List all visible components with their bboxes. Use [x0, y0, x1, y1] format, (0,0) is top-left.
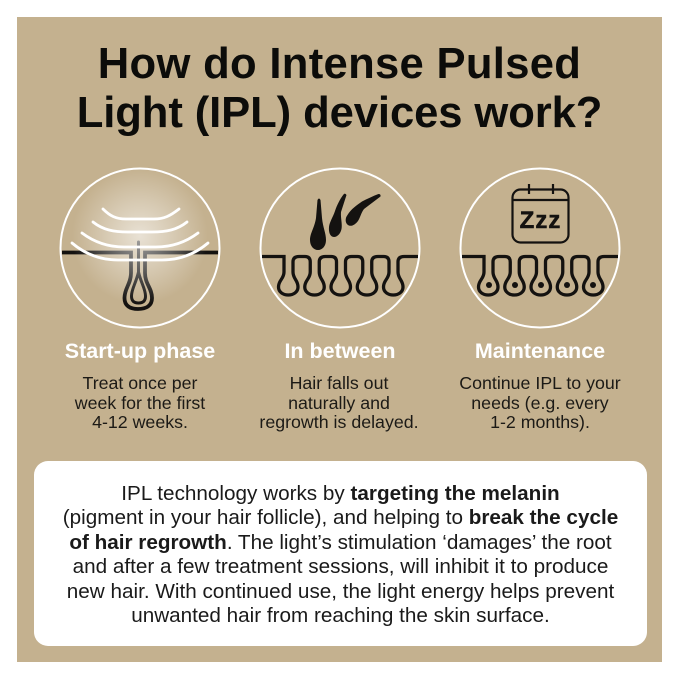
heading: maintenance: Maintenance — [475, 339, 605, 363]
text: in between: naturally and — [288, 392, 390, 412]
hair 1 — [310, 198, 326, 250]
icon: maintenance, calendar and dormant follicles — [460, 168, 620, 328]
hair 2 — [329, 194, 346, 237]
text: explanation: and after a few treatment sessions, will inhibit it to produce — [73, 555, 608, 578]
text: in between: Hair falls out — [290, 373, 388, 393]
title: How do Intense Pulsed — [98, 40, 581, 88]
text: explanation — [63, 482, 618, 627]
text: explanation: new hair. With continued use, the light energy helps prevent — [67, 580, 614, 603]
text: maintenance: Continue IPL to your — [459, 373, 621, 393]
hair 3 — [346, 194, 381, 226]
icon: start-up phase, light on follicle — [60, 168, 220, 328]
text: start-up phase: Treat once per — [82, 373, 197, 393]
text: maintenance — [459, 373, 621, 432]
heading: in between: In between — [284, 339, 396, 363]
title — [77, 40, 602, 136]
text: start-up phase: 4-12 weeks. — [92, 412, 188, 432]
text: explanation: of hair regrowth. The light’s stimulation ‘damages’ the root — [69, 531, 612, 554]
text: explanation: IPL technology works by targeting the melanin — [121, 482, 560, 504]
text: explanation: unwanted hair from reaching the skin surface. — [131, 604, 550, 627]
text: start-up phase — [74, 373, 206, 432]
text: maintenance: needs (e.g. every — [471, 392, 609, 412]
text: maintenance: 1-2 months). — [490, 412, 590, 432]
heading: start-up phase: Start-up phase — [65, 339, 215, 363]
icon: maintenance, calendar and dormant follicles: Zzz — [520, 207, 561, 234]
text: start-up phase: week for the first — [75, 392, 205, 412]
text: in between: regrowth is delayed. — [259, 412, 419, 432]
title: Light (IPL) devices work? — [77, 88, 602, 136]
text: in between — [259, 373, 419, 432]
icon: in between, hair falling out — [260, 168, 420, 328]
panel: explanation — [34, 461, 647, 646]
text: explanation: (pigment in your hair follicle), and helping to break the cycle — [63, 506, 618, 529]
